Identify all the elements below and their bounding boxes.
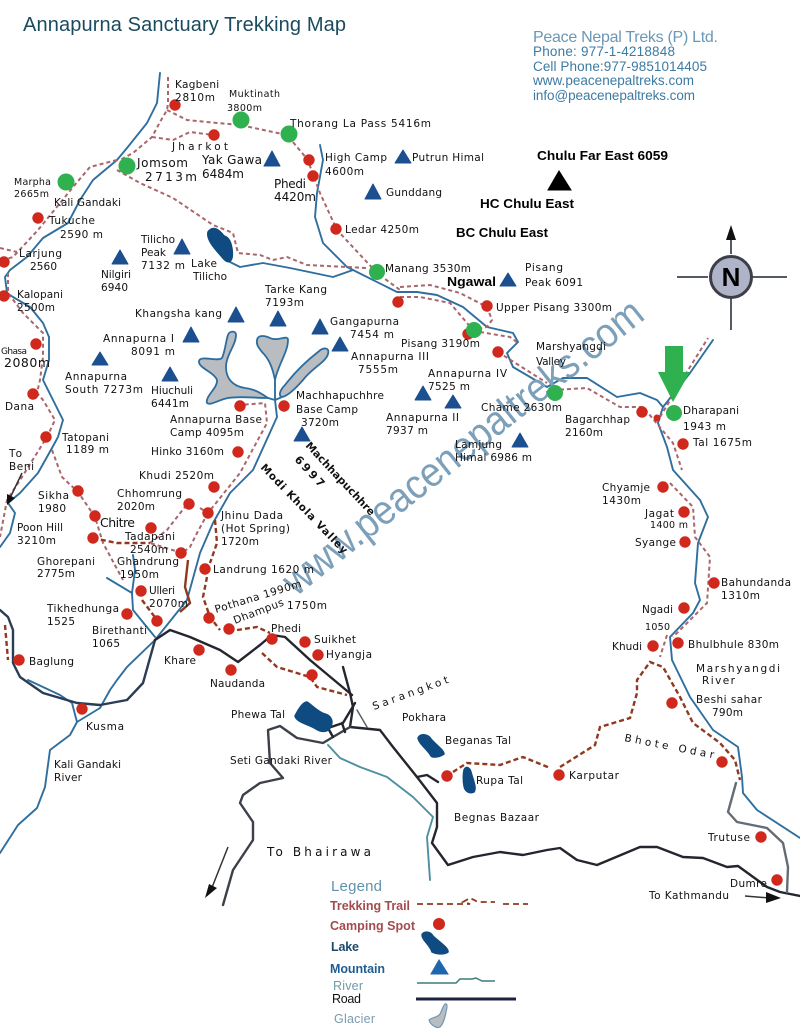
place labels: south-west: Camp 4095m <box>170 427 244 439</box>
place labels: north-west: Gunddang <box>386 187 442 199</box>
place labels: east: Syange <box>635 537 676 549</box>
bold Chulu labels: BC Chulu East <box>456 225 549 240</box>
company contact block: Peace Nepal Treks (P) Ltd. <box>533 29 718 46</box>
place labels: south-west: Hyangja <box>326 649 372 661</box>
place labels: north-west: Tukuche <box>48 215 95 227</box>
place labels: south-west: Poon Hill <box>17 522 63 534</box>
place labels: south-west: Kali Gandaki <box>54 759 121 771</box>
place labels: south-west: Tikhedhunga <box>46 603 119 615</box>
place labels: south-west: River <box>54 772 83 784</box>
place labels: east: Beshi sahar <box>696 694 763 706</box>
north compass: N <box>722 262 740 292</box>
place labels: north-west: Gangapurna <box>330 316 399 328</box>
place labels: north-west: South 7273m <box>65 384 143 396</box>
place labels: south-west: Hinko 3160m <box>151 446 224 458</box>
place labels: north-west: 2590 m <box>60 229 103 241</box>
place labels: east: Ngadi <box>642 604 673 616</box>
place labels: east: 1310m <box>721 590 760 602</box>
place labels: south-west: Tadapani <box>124 531 175 543</box>
place labels: south-west: Seti Gandaki River <box>230 755 333 767</box>
place labels: north-west: Kalopani <box>17 289 63 301</box>
lakes <box>208 229 475 793</box>
place labels: north-west: Kali Gandaki <box>54 197 121 209</box>
place labels: north-west: Larjung <box>19 248 62 260</box>
camping spots <box>0 99 783 886</box>
place labels: south-west: Phedi <box>271 623 301 635</box>
place labels: south-west: To <box>8 448 22 460</box>
place labels: south-west: Tatopani <box>61 432 109 444</box>
bold Chulu labels: HC Chulu East <box>480 196 575 211</box>
place labels: north-west: Tilicho <box>140 234 175 246</box>
place labels: south-west: 1525 <box>47 616 75 628</box>
place labels: east: Upper Pisang 3300m <box>496 302 612 314</box>
place labels: south-west: 2775m <box>37 568 75 580</box>
place labels: north-west: 6441m <box>151 398 189 410</box>
place labels: north-west: Hiuchuli <box>151 385 193 397</box>
legend: Camping Spot <box>330 919 416 933</box>
place labels: north-west: Tilicho <box>192 271 227 283</box>
place labels: north-west: Muktinath <box>229 89 280 100</box>
place labels: south-west: Dhampus <box>232 597 286 627</box>
place labels: north-west: Tarke Kang <box>264 284 327 296</box>
place labels: east: Rupa Tal <box>476 775 523 787</box>
direction arrows <box>7 473 781 903</box>
place labels: south-west: (Hot Spring) <box>221 523 290 535</box>
place labels: north-west: Ledar 4250m <box>345 224 419 236</box>
place labels: east: Chame 2630m <box>481 402 562 414</box>
place labels: south-west: Machhapuchhre <box>303 440 377 518</box>
place labels: east <box>266 262 791 902</box>
place labels: south-west <box>8 390 384 784</box>
place labels: east: Trutuse <box>707 832 750 844</box>
place labels: east: To Kathmandu <box>648 890 729 902</box>
place labels: north-west: 4600m <box>325 166 364 178</box>
place labels: south-west: Sikha <box>38 490 69 502</box>
legend: Legend <box>331 878 382 895</box>
place labels: south-west: Baglung <box>29 656 74 668</box>
place labels: south-west: Birethanti <box>92 625 147 637</box>
legend: Mountain <box>330 962 385 976</box>
place labels: east: Beganas Tal <box>445 735 511 747</box>
legend: Trekking Trail <box>330 899 410 913</box>
place labels: east: Begnas Bazaar <box>454 812 540 824</box>
place labels: south-west: Jhinu Dada <box>220 510 283 522</box>
legend: River <box>333 979 363 993</box>
place labels: north-west: Phedi <box>274 177 306 191</box>
place labels: east: Lamjung <box>455 439 502 451</box>
place labels: south-west: Kusma <box>86 721 124 733</box>
place labels: east: Bhote Odar <box>623 732 716 761</box>
place labels: south-west: 1189 m <box>66 444 109 456</box>
place labels: north-west: 7193m <box>265 297 304 309</box>
place labels: east: 1400 m <box>650 520 688 531</box>
place labels: east: 7525 m <box>428 381 470 393</box>
place labels: east: River <box>702 675 736 687</box>
place labels: north-west: Annapurna III <box>351 351 429 363</box>
place labels: south-west: Suikhet <box>314 634 356 646</box>
place labels: east: Dumre <box>730 878 767 890</box>
place labels: north-west: Annapurna <box>65 371 127 383</box>
place labels: north-west: Jharkot <box>171 141 228 153</box>
place labels: east: Peak 6091 <box>525 277 583 289</box>
title: Annapurna Sanctuary Trekking Map <box>23 14 346 36</box>
place labels: north-west: Kagbeni <box>175 79 220 91</box>
place labels: south-west: 3720m <box>301 417 339 429</box>
place labels: north-west: 7132 m <box>141 260 185 272</box>
place labels: north-west: Marpha <box>14 177 51 188</box>
place labels: south-west: 2540m <box>130 544 168 556</box>
rivers <box>0 73 800 880</box>
place labels: north-west: 2 7 1 3 m <box>145 170 197 184</box>
place labels: south-west: Ghandrung <box>117 556 179 568</box>
watermark: www.peacenepaltreks.com <box>272 289 652 605</box>
place labels: north-west: 2560 <box>30 261 57 273</box>
company contact block: www.peacenepaltreks.com <box>532 73 694 88</box>
place labels: north-west: Nilgiri <box>101 269 131 281</box>
place labels: south-west: 1750m <box>287 600 327 612</box>
place labels: south-west: 2020m <box>117 501 155 513</box>
place labels: east: 790m <box>712 707 743 719</box>
place labels: east: Bahundanda <box>721 577 791 589</box>
place labels: east: Pokhara <box>402 712 446 724</box>
place labels: south-west: 3210m <box>17 535 56 547</box>
legend <box>330 878 528 1027</box>
company contact block: info@peacenepaltreks.com <box>533 88 695 103</box>
place labels: east: Khudi <box>612 641 642 653</box>
place labels: south-west: Machhapuchhre <box>296 390 384 402</box>
place labels: south-west: Chitre <box>100 515 135 530</box>
place labels: south-west: Landrung 1620 m <box>213 564 314 576</box>
place labels: north-west: Jomsom <box>136 156 188 170</box>
place labels: east: 1943 m <box>683 421 726 433</box>
place labels: south-west: Phewa Tal <box>231 709 285 721</box>
bold Chulu labels: Chulu Far East 6059 <box>537 148 668 163</box>
place labels: east: Tal 1675m <box>692 437 752 449</box>
place labels: south-west: Pothana 1990m <box>213 578 303 616</box>
legend: Road <box>332 992 361 1006</box>
place labels: east: Marshyangdi <box>696 663 780 675</box>
place labels: south-west: 1950m <box>120 569 159 581</box>
place labels: north-west: Peak <box>141 247 167 259</box>
place labels: north-west: 7555m <box>358 364 398 376</box>
trekking trails <box>0 77 740 780</box>
bold Chulu labels <box>447 148 668 289</box>
place labels: north-west: Khangsha kang <box>135 308 222 320</box>
mountain peaks <box>92 150 571 447</box>
place labels: north-west: Yak Gawa <box>201 153 262 167</box>
place labels: north-west: Annapurna I <box>103 333 174 345</box>
place labels: south-west: Khare <box>164 655 196 667</box>
place labels: south-west: Beni <box>9 461 34 473</box>
legend: Lake <box>331 940 359 954</box>
place labels: south-west: 1980 <box>38 503 66 515</box>
place labels: east: Jagat <box>644 508 674 520</box>
place labels: north-west: 2500m <box>17 302 55 314</box>
place labels: east: 1430m <box>602 495 641 507</box>
company contact block: Cell Phone:977-9851014405 <box>533 59 707 74</box>
place labels: east: 7937 m <box>386 425 428 437</box>
place labels: south-west: Modi Khola Valley <box>258 462 350 557</box>
place labels: south-west: 1065 <box>92 638 120 650</box>
place labels: south-west: Base Camp <box>296 404 358 416</box>
green highlighted stops <box>58 112 682 421</box>
place labels: north-west: Thorang La Pass 5416m <box>289 118 431 130</box>
place labels: north-west: 2080m <box>4 355 50 370</box>
place labels: east: To Bhairawa <box>266 845 371 859</box>
place labels: east: Marshyangdi <box>536 341 606 353</box>
company contact block: Phone: 977-1-4218848 <box>533 44 675 59</box>
place labels: south-west: Naudanda <box>210 678 265 690</box>
place labels: north-west <box>1 79 484 413</box>
place labels: south-west: Khudi 2520m <box>139 470 214 482</box>
place labels: east: Bagarchhap <box>565 414 630 426</box>
place labels: east: Pisang <box>525 262 563 274</box>
place labels: east: Manang 3530m <box>385 263 471 275</box>
place labels: east: 1050 <box>645 622 670 633</box>
north compass <box>677 225 787 330</box>
place labels: north-west: Lake <box>191 258 217 270</box>
place labels: south-west: Ghorepani <box>37 556 95 568</box>
place labels: north-west: 7454 m <box>350 329 394 341</box>
place labels: east: Annapurna IV <box>428 368 508 380</box>
place labels: east: Valley <box>536 356 566 368</box>
place labels: north-west: Ghasa <box>1 347 27 357</box>
place labels: north-west: Putrun Himal <box>412 152 484 164</box>
place labels: north-west: Dana <box>5 401 34 413</box>
legend: Glacier <box>334 1012 375 1026</box>
place labels: north-west: 6484m <box>202 167 244 181</box>
green arrow <box>658 346 690 402</box>
place labels: north-west: 8091 m <box>131 346 175 358</box>
place labels: east: Chyamje <box>602 482 650 494</box>
place labels: south-west: Ulleri <box>149 585 175 597</box>
place labels: east: 2160m <box>565 427 603 439</box>
place labels: east: Sarangkot <box>371 674 450 713</box>
place labels: south-west: Annapurna Base <box>170 414 262 426</box>
place labels: south-west: 2070m <box>149 598 188 610</box>
place labels: north-west: 6940 <box>101 282 128 294</box>
place labels: east: Karputar <box>569 770 620 782</box>
place labels: east: Dharapani <box>683 405 739 417</box>
place labels: north-west: High Camp <box>325 152 387 164</box>
roads <box>0 610 800 905</box>
place labels: east: Pisang 3190m <box>401 338 480 350</box>
place labels: east: Bhulbhule 830m <box>688 639 779 651</box>
glaciers <box>199 332 328 404</box>
company contact block <box>532 29 718 103</box>
place labels: north-west: 3800m <box>227 103 262 114</box>
place labels: north-west: 2810m <box>175 92 215 104</box>
place labels: south-west: 1720m <box>221 536 259 548</box>
place labels: east: Himal 6986 m <box>455 452 532 464</box>
bold Chulu labels: Ngawal <box>447 274 496 289</box>
place labels: east: Annapurna II <box>386 412 459 424</box>
place labels: north-west: 4420m <box>274 190 316 204</box>
place labels: north-west: 2665m <box>14 189 49 200</box>
place labels: south-west: Chhomrung <box>117 488 182 500</box>
place labels: south-west: 6997 <box>292 453 327 490</box>
